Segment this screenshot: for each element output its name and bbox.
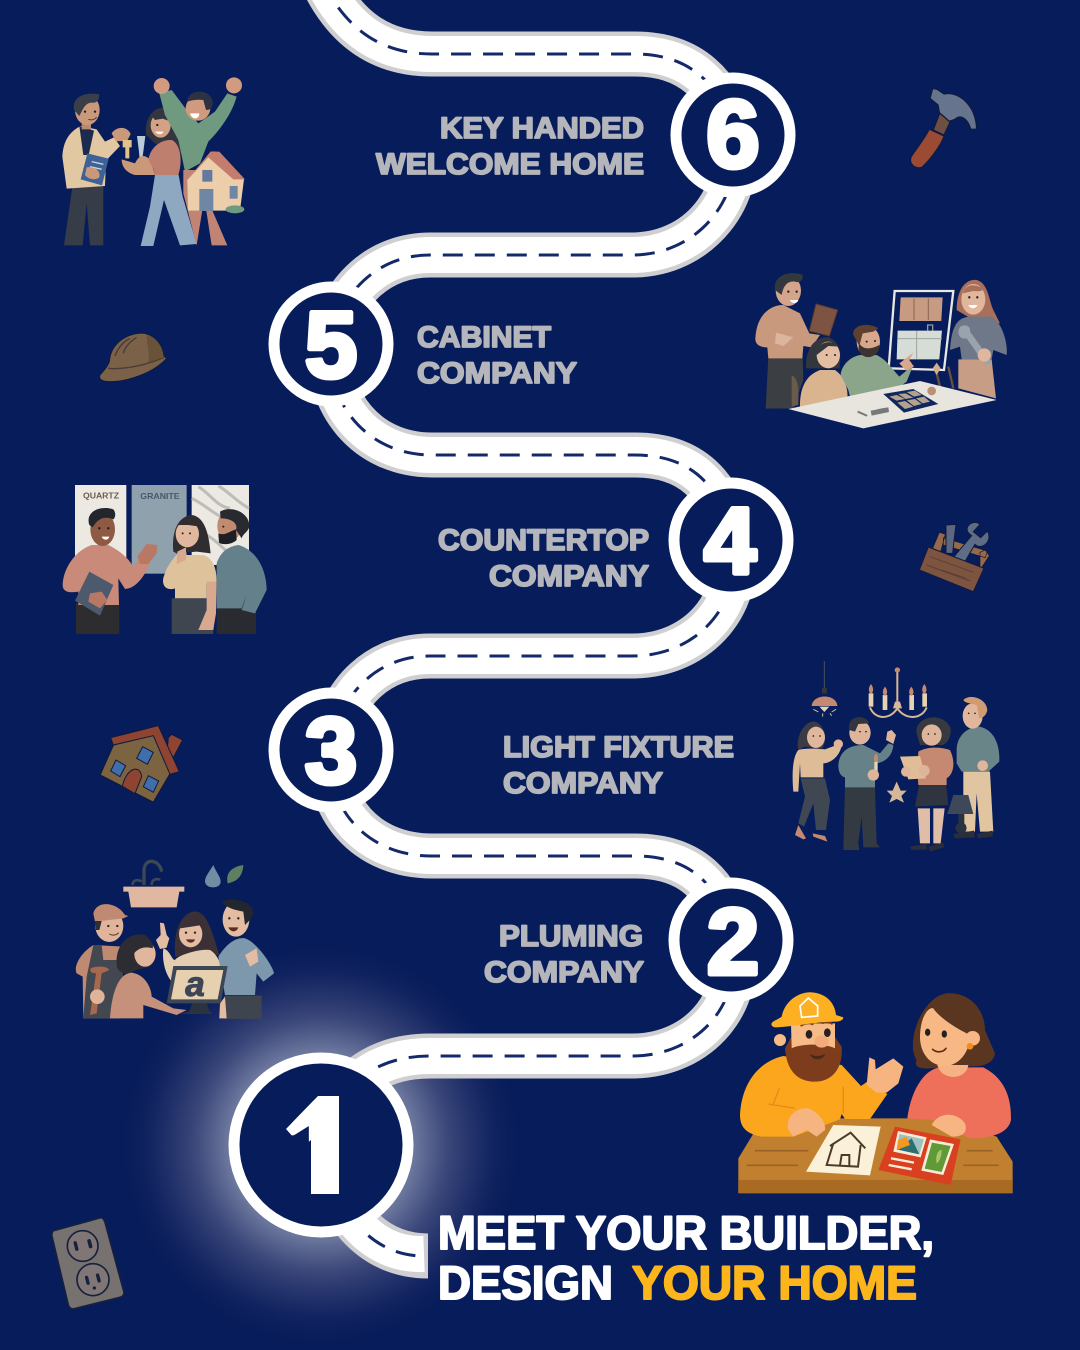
step 1 marker: 1 [283,1070,359,1224]
icon: hard hat [100,333,167,382]
label: step 6: KEY HANDED [440,112,644,145]
step 6 marker [676,78,790,192]
step 4 marker [674,483,788,597]
step 2 marker [674,883,788,997]
step 5 marker: 5 [305,292,357,397]
illustration: light fixture company [793,661,999,852]
step 3 marker [274,693,388,807]
illustration: countertop company: GRANITE [140,491,180,501]
illustration: plumbing company [76,861,274,1019]
title: step 1 headline: MEET YOUR BUILDER, [438,1206,934,1259]
label: step 5: CABINET [417,321,551,354]
step 1 marker [234,1058,408,1232]
title: step 1 headline: YOUR HOME [632,1256,917,1309]
label: step 4 [438,524,649,593]
label: step 4: COUNTERTOP [438,524,649,557]
icon: power outlet [52,1218,124,1309]
man figure [740,992,903,1137]
title: step 1 headline [438,1206,934,1309]
label: step 5 [417,321,577,390]
table [738,1118,1013,1193]
glow behind step 1 [116,940,526,1350]
winding road [321,0,735,1256]
woman figure [907,993,1011,1138]
illustration: cabinet company [755,273,1007,428]
title: step 1 headline: DESIGN [438,1256,613,1309]
label: step 2: COMPANY [484,956,644,989]
label: step 6 [376,112,644,181]
photo booklet [878,1127,961,1185]
step 3 marker: 3 [305,698,357,803]
label: step 2: PLUMING [499,920,643,953]
icon: house [100,726,183,802]
illustration: countertop company [63,485,267,634]
label: step 6: WELCOME HOME [376,148,644,181]
label: step 3 [503,731,734,800]
label: step 2 [484,920,644,989]
illustration: countertop company: QUARTZ [83,492,119,501]
step 6 marker: 6 [706,81,760,188]
label: step 5: COMPANY [417,357,577,390]
label: step 4: COMPANY [489,560,649,593]
illustration: builder and client [738,992,1013,1193]
label: step 3: COMPANY [503,767,663,800]
icon: toolbox [919,522,989,592]
step 2 marker: 2 [707,889,759,994]
icon: hammer [911,88,977,168]
step 5 marker [274,287,388,401]
illustration: key handover [62,77,245,246]
illustration: plumbing company: a [185,965,205,1004]
step 4 marker: 4 [704,488,756,593]
label: step 3: LIGHT FIXTURE [503,731,734,764]
floor plan sheet [806,1125,881,1175]
